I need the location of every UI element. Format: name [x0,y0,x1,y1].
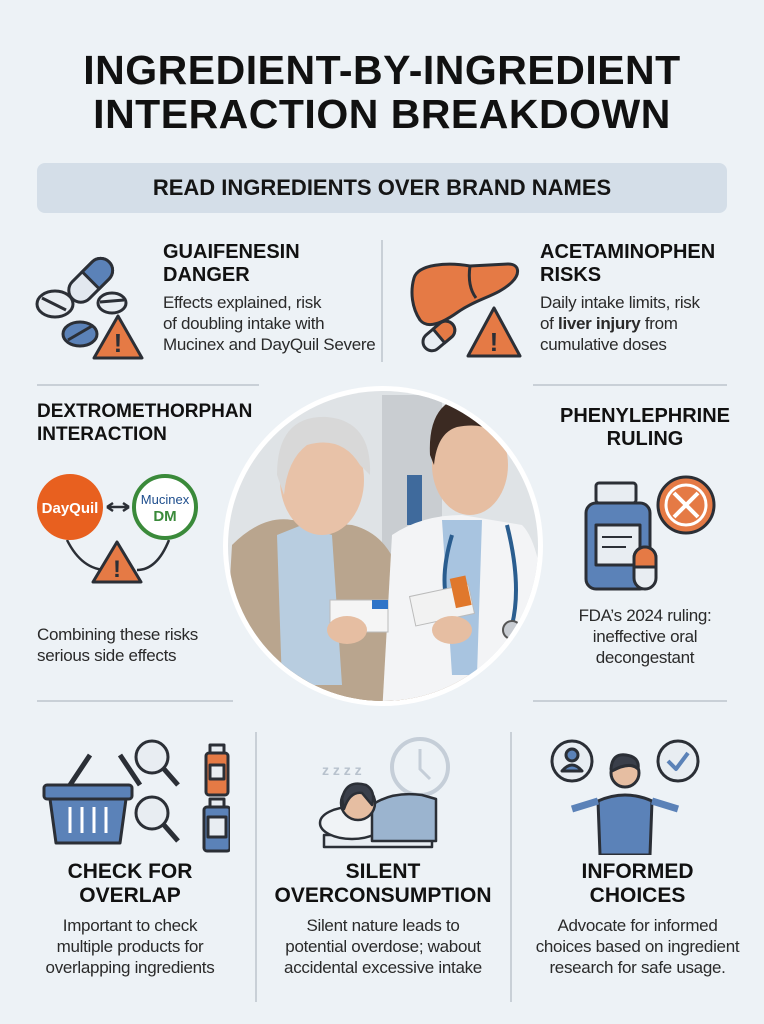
icon: basket, magnifiers, bottles [42,740,230,852]
elderly woman [230,519,400,701]
text: FDA’s 2024 ruling: [579,606,711,625]
icon: liver: ! [490,327,498,357]
icon: dayquil mucinex interaction: ! [113,556,121,583]
heading: INFORMED [582,860,694,883]
heading [274,860,492,907]
heading [582,860,694,907]
icon: dayquil mucinex interaction: Mucinex [141,492,190,507]
icon: dayquil mucinex interaction [37,474,198,584]
heading: OVERLAP [79,884,181,907]
heading: OVERCONSUMPTION [274,884,492,907]
panel: phenylephrine [560,405,730,667]
text: serious side effects [37,646,176,665]
text: Daily intake limits, risk [540,293,700,312]
text [37,625,198,665]
text: of liver injury from [540,314,678,333]
banner: read ingredients [37,163,727,213]
icon: bottle and cross [584,476,716,590]
text [579,606,711,667]
heading [540,241,715,286]
panel: acetaminophen [410,241,715,358]
title [83,47,681,137]
text: choices based on ingredient [536,937,739,956]
title: INGREDIENT-BY-INGREDIENT [83,47,681,93]
text: Mucinex and DayQuil Severe [163,335,375,354]
text [284,916,482,977]
text [46,916,214,977]
text: decongestant [596,648,694,667]
text: research for safe usage. [549,958,726,977]
icon: dayquil mucinex interaction: DayQuil [42,500,98,517]
heading: RULING [607,428,683,450]
heading: RISKS [540,264,601,286]
text [540,293,700,354]
heading: CHECK FOR [68,860,192,883]
heading: GUAIFENESIN [163,241,300,263]
text [163,293,375,354]
panel: guaifenesin [36,241,375,360]
heading: ACETAMINOPHEN [540,241,715,263]
heading: DEXTROMETHORPHAN [37,401,252,422]
text: overlapping ingredients [46,958,214,977]
banner: read ingredients: READ INGREDIENTS OVER BRAND NAMES [153,175,611,200]
heading: PHENYLEPHRINE [560,405,730,427]
text: ineffective oral [593,627,697,646]
icon: pills: ! [114,328,122,358]
icon: pills [36,256,144,360]
text: Silent nature leads to [306,916,460,935]
young man [382,515,538,701]
heading: SILENT [346,860,420,883]
heading: CHOICES [590,884,685,907]
panel: dextromethorphan [37,401,252,665]
icon: dayquil mucinex interaction: DM [153,508,177,525]
text: Important to check [63,916,197,935]
text: of doubling intake with [163,314,324,333]
icon: sleeping person with clock: z z z z [322,762,362,778]
heading [163,241,300,286]
text: multiple products for [57,937,203,956]
icon: liver [410,262,522,358]
panel: check for overlap [42,740,230,977]
text: Effects explained, risk [163,293,321,312]
text: accidental excessive intake [284,958,482,977]
heading [68,860,192,907]
heading: INTERACTION [37,424,167,445]
heading [560,405,730,450]
boxes [330,600,388,632]
panel: silent overconsumption [274,737,492,977]
panel: informed choices [536,740,740,977]
heading: DANGER [163,264,250,286]
icon: sleeping person with clock [318,737,450,848]
title: INTERACTION BREAKDOWN [93,91,671,137]
text: Advocate for informed [557,916,718,935]
heading [37,401,252,445]
photo: patient and pharmacist [223,386,543,706]
text [536,916,740,977]
text: cumulative doses [540,335,667,354]
text: Combining these risks [37,625,198,644]
text: potential overdose; wabout [285,937,481,956]
icon: person weighing choices [550,740,700,855]
